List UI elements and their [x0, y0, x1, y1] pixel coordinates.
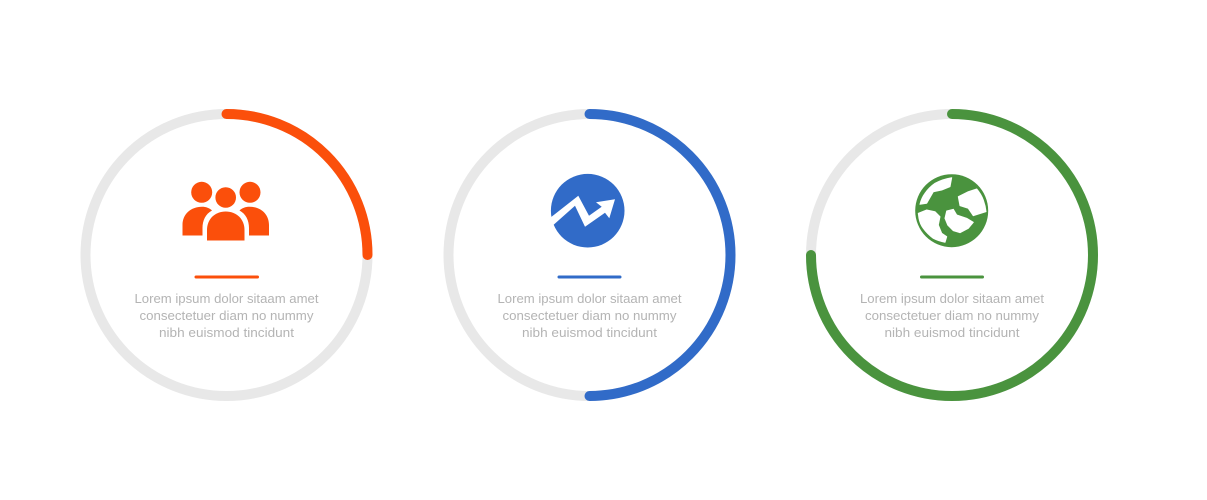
accent line	[559, 276, 620, 278]
panel: blue 50% progress	[448, 114, 730, 396]
description text: consectetuer diam no nummy	[865, 308, 1040, 323]
accent line	[196, 276, 258, 278]
description text: Lorem ipsum dolor sitaam amet	[134, 291, 319, 306]
description text	[134, 291, 319, 340]
progress ring track	[448, 114, 730, 396]
description text: Lorem ipsum dolor sitaam amet	[498, 291, 682, 306]
description text: consectetuer diam no nummy	[502, 308, 677, 323]
icon: chart arrow in circle	[550, 174, 624, 248]
description text: Lorem ipsum dolor sitaam amet	[860, 291, 1044, 306]
description text: nibh euismod tincidunt	[159, 325, 294, 340]
description text: nibh euismod tincidunt	[884, 325, 1020, 340]
panel: orange 25% progress	[86, 114, 368, 396]
progress arc: 75%	[811, 114, 1093, 396]
icon: globe	[915, 174, 988, 247]
description text: consectetuer diam no nummy	[140, 308, 314, 323]
description text: nibh euismod tincidunt	[522, 325, 657, 340]
description text	[498, 291, 682, 340]
progress ring track	[811, 114, 1093, 396]
progress arc: 25%	[226, 114, 368, 255]
progress ring track	[86, 114, 368, 396]
progress arc: 50%	[590, 114, 730, 396]
description text	[860, 291, 1044, 340]
icon: group of people	[182, 182, 269, 240]
accent line	[922, 276, 982, 278]
panel: green 75% progress	[811, 114, 1093, 396]
